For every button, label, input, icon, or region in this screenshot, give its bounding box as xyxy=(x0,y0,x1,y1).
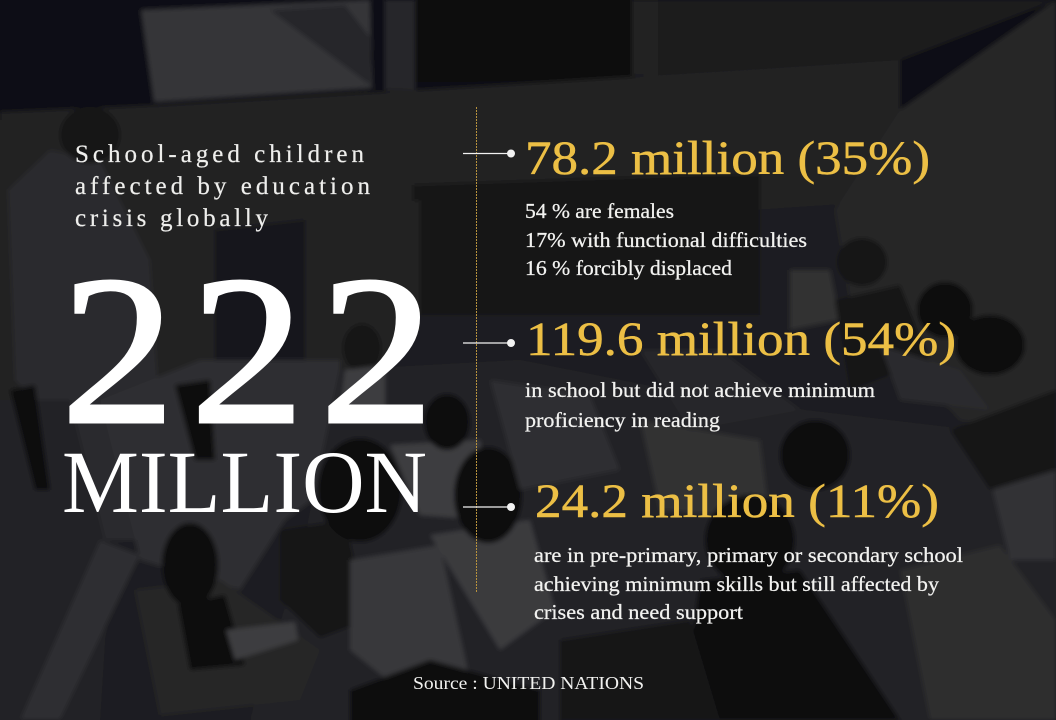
statistic: 78.2 million: 78.2 million (35%) xyxy=(525,132,930,185)
details: first statistic: 54 % are females xyxy=(525,199,674,223)
details: first statistic xyxy=(525,199,807,280)
details: second statistic: in school but did not achieve minimum xyxy=(525,378,875,402)
big label: MILLION: MILLION xyxy=(62,434,427,532)
statistic: 24.2 million: 24.2 million (11%) xyxy=(535,475,939,528)
heading: school-aged children: affected by education xyxy=(75,173,370,200)
details: first statistic: 16 % forcibly displaced xyxy=(525,256,733,280)
details: second statistic xyxy=(525,378,875,432)
details: third statistic: crises and need support xyxy=(534,600,743,624)
details: third statistic xyxy=(534,543,963,624)
connector: second statistic xyxy=(463,339,515,347)
details: third statistic: achieving minimum skills but still affected by xyxy=(534,572,940,596)
source credit: Source : UNITED NATIONS xyxy=(413,673,644,693)
divider: dotted gold vertical line xyxy=(476,107,478,593)
details: third statistic: are in pre-primary, primary or secondary school xyxy=(534,543,963,567)
connector: first statistic xyxy=(463,150,515,158)
details: first statistic: 17% with functional difficulties xyxy=(525,228,807,252)
details: second statistic: proficiency in reading xyxy=(525,408,721,432)
connector: third statistic xyxy=(463,503,515,511)
heading: school-aged children xyxy=(75,141,370,232)
big number: 222: 222 xyxy=(61,232,434,468)
statistic: 119.6 million: 119.6 million (54%) xyxy=(526,313,956,366)
heading: school-aged children: School-aged children xyxy=(75,141,364,168)
heading: school-aged children: crisis globally xyxy=(75,205,268,232)
